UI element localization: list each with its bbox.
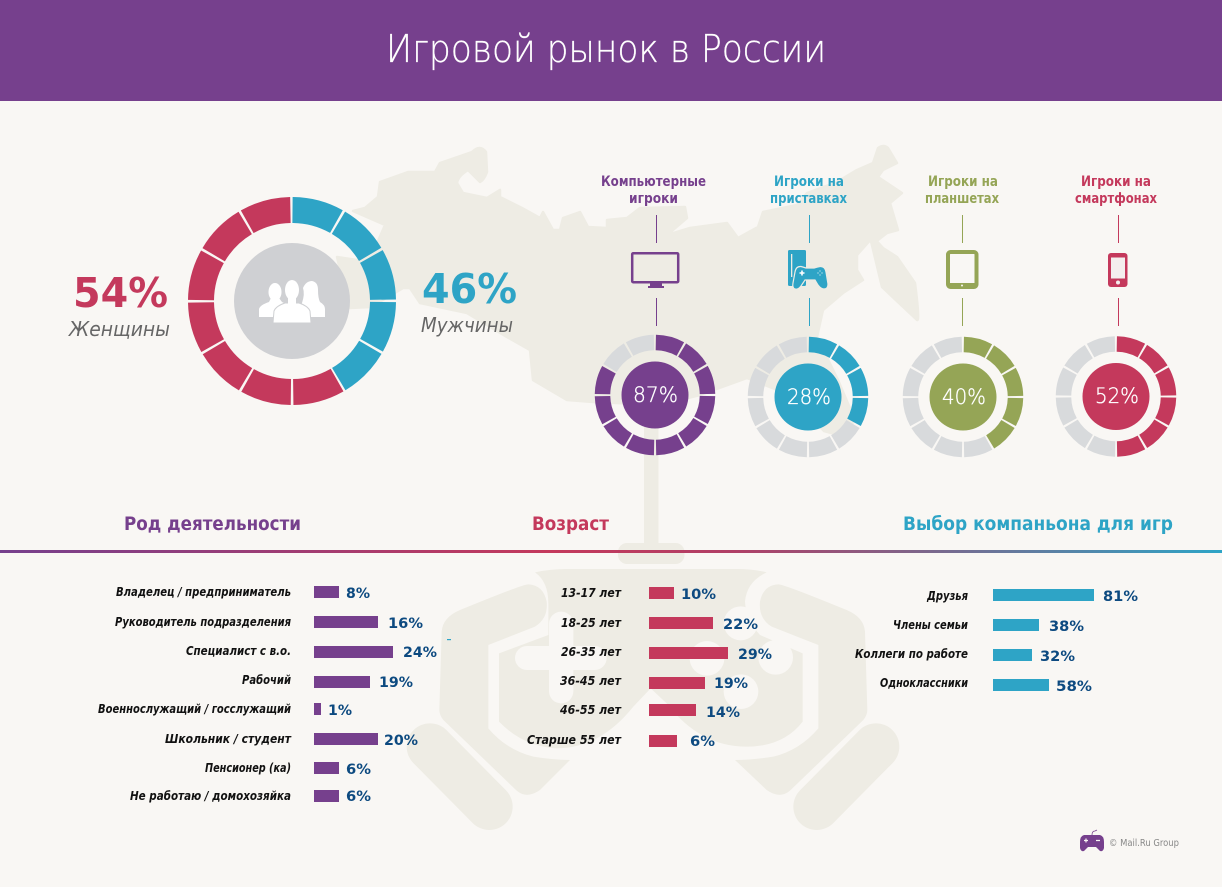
row: student: 20%	[384, 733, 418, 749]
heading: Игроки на	[928, 174, 998, 190]
row: 18-25: 18-25 лет	[561, 616, 622, 630]
row: family: Члены семьи	[893, 618, 968, 632]
heading: Игроки на	[774, 174, 844, 190]
row: 46-55: 46-55 лет	[559, 703, 622, 717]
panel: tablet games	[892, 174, 1034, 468]
title: Игровой рынок в России	[386, 27, 826, 71]
panel: gender split	[67, 177, 517, 425]
row: friends: Друзья	[926, 589, 968, 603]
row: 18-25	[561, 616, 758, 633]
icon: console and gamepad	[788, 250, 828, 289]
row: not working	[130, 789, 371, 805]
chart: companion bars	[855, 589, 1138, 695]
row: specialist: 24%	[403, 645, 437, 661]
heading: companion choice: Выбор компаньона для игр	[903, 513, 1173, 535]
heading: игроки	[629, 191, 678, 207]
row: 26-35: 29%	[738, 647, 772, 663]
row: classmates: 58%	[1056, 679, 1092, 695]
logo: Mail.Ru Group	[1080, 830, 1179, 851]
chart: age bars	[527, 586, 772, 750]
background map of Russia	[337, 146, 918, 436]
row: friends: 81%	[1103, 589, 1138, 605]
value: 52%	[1095, 384, 1139, 408]
row: not working: Не работаю / домохозяйка	[130, 789, 291, 803]
row: head of unit: 16%	[388, 616, 423, 632]
row: 18-25: 22%	[723, 617, 758, 633]
row: 46-55	[559, 703, 740, 721]
row: 36-45	[560, 674, 748, 692]
row: over 55: Старше 55 лет	[527, 733, 622, 747]
value: 28%	[787, 385, 831, 409]
heading: age: Возраст	[532, 513, 609, 535]
stat: men: 46%	[422, 265, 517, 313]
row: 13-17: 10%	[681, 587, 716, 603]
heading: Компьютерные	[601, 174, 706, 190]
background game controller	[430, 425, 876, 807]
row: over 55: 6%	[690, 734, 715, 750]
stat: women	[67, 269, 170, 341]
row: classmates: Одноклассники	[880, 676, 968, 690]
donut: 40%	[892, 326, 1034, 468]
icon: people	[234, 243, 350, 359]
chart: occupation bars	[98, 585, 437, 805]
row: pensioner	[205, 761, 371, 778]
heading: смартфонах	[1075, 191, 1157, 207]
row: owner	[116, 585, 370, 602]
icon: gamepad	[1080, 830, 1104, 851]
heading: occupation: Род деятельности	[124, 513, 301, 535]
stat: women: 54%	[73, 269, 168, 317]
icon: monitor	[632, 253, 678, 288]
heading: приставках	[770, 191, 847, 207]
stat: men: Мужчины	[421, 313, 513, 337]
donut: 28%	[736, 325, 880, 469]
connector lines	[962, 215, 964, 326]
panel: computer games	[583, 174, 727, 467]
row: pensioner: Пенсионер (ка)	[205, 761, 291, 775]
row: military: Военнослужащий / госслужащий	[98, 702, 291, 716]
row: 13-17: 13-17 лет	[561, 586, 622, 600]
stat: men	[421, 265, 517, 337]
connector lines	[1118, 215, 1120, 326]
row: student: Школьник / студент	[165, 732, 292, 746]
row: friends	[926, 589, 1138, 605]
row: classmates	[880, 676, 1092, 695]
row: worker	[242, 673, 413, 691]
donut: gender ring	[168, 177, 416, 425]
row: 36-45: 36-45 лет	[560, 674, 622, 688]
row: pensioner: 6%	[346, 762, 371, 778]
row: worker: Рабочий	[242, 673, 291, 687]
row: 26-35: 26-35 лет	[561, 645, 622, 659]
donut: 87%	[583, 323, 727, 467]
connector lines	[656, 215, 658, 326]
donut: 52%	[1063, 343, 1169, 450]
icon: tablet	[948, 252, 976, 288]
row: family	[893, 618, 1084, 635]
row: military: 1%	[328, 703, 352, 719]
row: colleagues	[855, 647, 1075, 665]
row: student	[165, 732, 418, 749]
value: 87%	[633, 383, 678, 407]
row: owner: 8%	[346, 586, 370, 602]
row: family: 38%	[1049, 619, 1084, 635]
row: 36-45: 19%	[714, 676, 748, 692]
row: not working: 6%	[346, 789, 371, 805]
row: specialist	[186, 644, 437, 661]
header band	[0, 0, 1222, 101]
stat: women: Женщины	[67, 317, 170, 341]
row: specialist: Специалист с в.о.	[186, 644, 291, 658]
row: 46-55: 14%	[706, 705, 740, 721]
row: colleagues: Коллеги по работе	[855, 647, 968, 661]
value: 40%	[942, 385, 986, 409]
panel: smartphone games	[1063, 174, 1169, 450]
row: worker: 19%	[379, 675, 413, 691]
row: head of unit	[115, 615, 423, 632]
connector lines	[808, 215, 810, 326]
panel: console games	[736, 174, 880, 469]
heading: Игроки на	[1081, 174, 1151, 190]
row: over 55	[527, 733, 715, 750]
icon: phone	[1108, 253, 1128, 287]
row: head of unit: Руководитель подразделения	[115, 615, 291, 629]
row: colleagues: 32%	[1040, 649, 1075, 665]
heading: планшетах	[925, 191, 999, 207]
row: owner: Владелец / предприниматель	[116, 585, 291, 599]
row: 13-17	[561, 586, 716, 603]
text: © Mail.Ru Group	[1109, 838, 1179, 849]
row: 26-35	[561, 645, 772, 663]
